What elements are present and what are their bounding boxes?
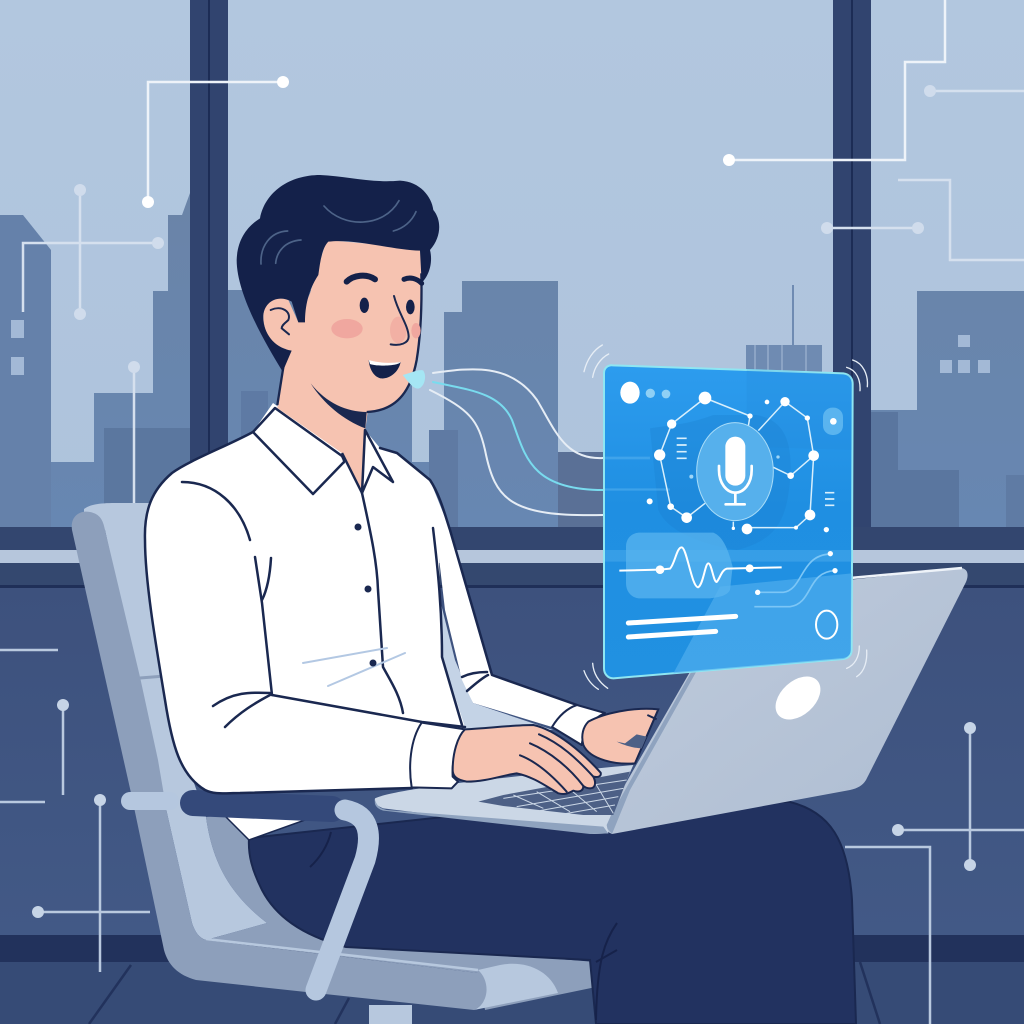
keyboard <box>478 772 630 815</box>
hair highlights <box>261 201 416 264</box>
shirt far arm shadow <box>440 600 553 730</box>
armrest <box>193 803 332 809</box>
waveform card <box>619 533 782 598</box>
laptop base and keyboard <box>375 765 633 834</box>
eyebrows <box>347 276 375 282</box>
far hand <box>582 709 658 764</box>
shirt outlines and creases <box>145 432 577 793</box>
shirt collar <box>253 408 393 494</box>
panel shade bands <box>605 368 852 673</box>
shirt tail <box>224 812 305 840</box>
neck <box>277 347 370 493</box>
window dots <box>620 382 640 404</box>
network graph <box>660 398 814 528</box>
chair seat front <box>474 964 558 1010</box>
connector traces <box>754 554 835 607</box>
hands and cuffs <box>410 705 658 794</box>
leg fold lines <box>310 832 617 1020</box>
chair back bar stub <box>130 792 170 810</box>
microphone badge <box>697 423 773 521</box>
holographic panel <box>584 345 867 689</box>
jaw line <box>367 273 422 412</box>
list icons <box>677 438 834 505</box>
status pill <box>823 408 843 435</box>
shirt far arm <box>430 480 605 727</box>
ring icon <box>816 611 837 639</box>
laptop lid hinge edge <box>605 590 742 834</box>
ear line <box>271 308 289 334</box>
sound arcs <box>584 345 867 689</box>
chair back dark band <box>72 512 487 1010</box>
mouth <box>369 360 401 378</box>
panel body <box>604 365 853 678</box>
legs <box>249 800 856 1024</box>
chair inner cushion shade <box>206 815 596 1010</box>
eyes <box>360 298 369 313</box>
nose <box>391 296 409 345</box>
face <box>288 240 422 412</box>
neck shadow <box>311 383 367 428</box>
laptop logo <box>767 668 829 728</box>
window frames <box>0 0 1024 588</box>
laptop lid top highlight <box>850 568 962 578</box>
shirt buttons <box>354 524 376 666</box>
laptop lid <box>600 568 968 834</box>
cheeks <box>331 319 363 338</box>
hair <box>237 175 439 372</box>
armrest support tube <box>316 810 368 990</box>
far cuff <box>552 705 605 745</box>
ear <box>263 298 303 350</box>
chair pedestal <box>369 1005 412 1024</box>
chair back light panel <box>84 503 267 940</box>
shirt torso and near arm fill <box>145 403 465 793</box>
wall and floor <box>0 588 1024 1024</box>
city skyline <box>0 193 1024 527</box>
voice wave lines <box>430 369 603 515</box>
text bars <box>628 616 736 637</box>
voice drop <box>403 370 425 389</box>
chair <box>72 503 596 1024</box>
near cuff <box>410 723 465 788</box>
near hand <box>453 725 601 794</box>
background: sky <box>0 0 1024 540</box>
head and face <box>237 175 439 493</box>
